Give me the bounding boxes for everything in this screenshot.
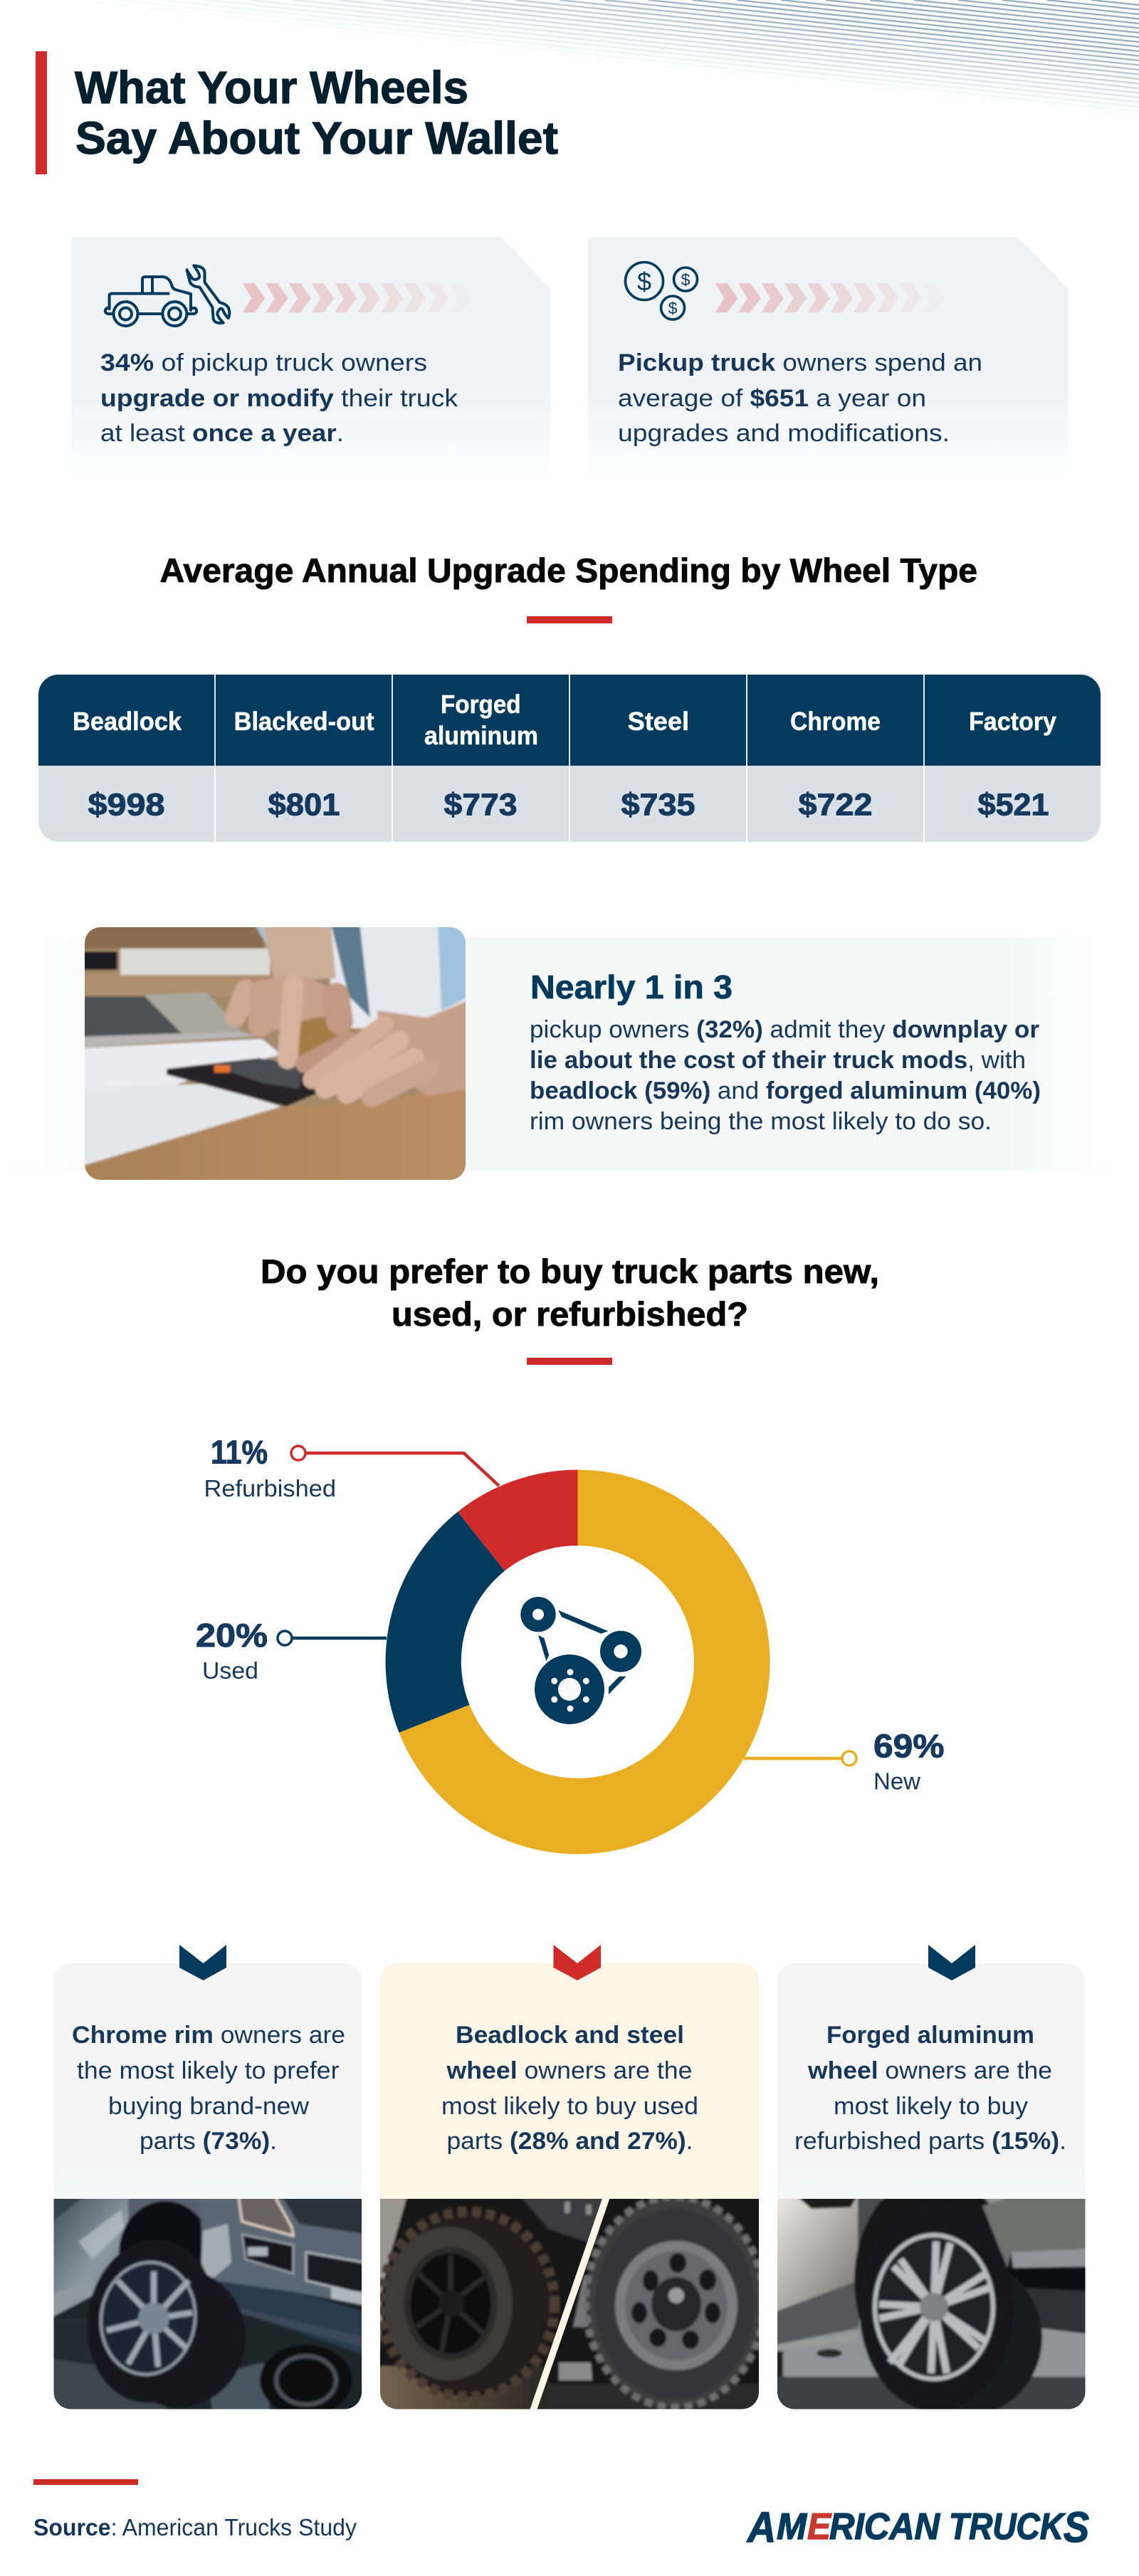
- card text: the most likely to prefer: [77, 2057, 339, 2084]
- logo: American Trucks: TRUCK: [949, 2506, 1066, 2548]
- panel: upgrade frequency: [71, 237, 550, 484]
- callout: refurbished: Refurbished: [204, 1475, 336, 1501]
- logo: American Trucks: E: [807, 2506, 831, 2548]
- column: Steel: $735: [621, 787, 695, 823]
- column: Blacked-out: $801: [268, 787, 340, 823]
- column: Steel: [621, 707, 695, 823]
- photo: chrome wheel: [50, 2195, 367, 2416]
- source line: Source: American Trucks Study: [33, 2514, 357, 2540]
- card background: [71, 237, 550, 484]
- heading: spending by wheel type: Average Annual Upgrade Spending by Wheel Type: [159, 551, 977, 589]
- panel: beadlock and steel owners: [377, 1945, 764, 2412]
- band text: pickup owners (32%) admit they downplay or: [530, 1016, 1039, 1043]
- heading: buying preference: Do you prefer to buy truck parts new,: [261, 1252, 879, 1290]
- footer accent bar: [33, 2479, 138, 2485]
- card text: 34% of pickup truck owners: [100, 349, 427, 376]
- chevron trail: [715, 283, 945, 312]
- card background: [54, 1963, 362, 2409]
- panel: average spend: [588, 237, 1068, 484]
- card text: at least once a year .: [100, 420, 344, 447]
- icon: coins: $: [668, 299, 678, 317]
- card text: parts (73%).: [140, 2128, 277, 2155]
- band background: [0, 937, 1139, 1171]
- card text: [618, 349, 982, 447]
- column: Factory: Factory: [969, 707, 1056, 736]
- title: What Your Wheels: [75, 62, 468, 113]
- card text: [100, 349, 458, 447]
- card text: Pickup truck owners spend an: [618, 349, 982, 376]
- band text: [530, 1016, 1041, 1135]
- icon: belt and pulleys: [520, 1597, 641, 1724]
- card text: average of $651 a year on: [618, 385, 926, 412]
- photo: beadlock and steel wheels: [377, 2195, 764, 2412]
- card text: most likely to buy used: [441, 2093, 698, 2120]
- column: Forged aluminum: $773: [444, 787, 517, 823]
- icon: chevron: [179, 1945, 226, 1980]
- column: Chrome: $722: [799, 787, 873, 823]
- card text: Beadlock and steel: [456, 2022, 684, 2049]
- column: Forged aluminum: aluminum: [424, 721, 538, 750]
- panel: nearly 1 in 3: [85, 927, 1039, 1180]
- column: Factory: $521: [978, 787, 1049, 823]
- slice: used 20%: [386, 1511, 505, 1733]
- card text: most likely to buy: [834, 2093, 1028, 2120]
- logo: American Trucks: RICAN: [829, 2506, 940, 2548]
- title accent bar: [36, 51, 47, 174]
- icon: truck and wrench: [105, 265, 229, 326]
- column: Beadlock: [73, 707, 182, 823]
- heading: buying preference: used, or refurbished?: [392, 1295, 748, 1333]
- band text: beadlock (59%) and forged aluminum (40%): [530, 1077, 1041, 1104]
- card text: wheel owners are the: [446, 2057, 692, 2084]
- callout: new: New: [873, 1768, 920, 1795]
- panel: chrome rim owners: [50, 1945, 367, 2416]
- column: Steel: Steel: [628, 707, 689, 736]
- card text: refurbished parts (15%).: [794, 2128, 1066, 2155]
- icon: coins: $: [681, 270, 691, 289]
- column: Chrome: Chrome: [790, 707, 881, 736]
- callout: refurbished: 11%: [211, 1433, 268, 1470]
- logo: American Trucks: [746, 2503, 1089, 2551]
- card text: wheel owners are the: [807, 2057, 1052, 2084]
- callout: used: Used: [202, 1657, 258, 1684]
- logo: American Trucks: A: [746, 2503, 776, 2551]
- card text: [794, 2022, 1066, 2155]
- card text: parts (28% and 27%) .: [447, 2128, 693, 2155]
- heading underline: [527, 616, 612, 623]
- column: Beadlock: Beadlock: [73, 707, 182, 736]
- column: Factory: [969, 707, 1056, 823]
- heading: buying preference: [261, 1252, 879, 1333]
- icon: coins: [625, 262, 698, 320]
- icon: chevron: [928, 1945, 975, 1980]
- card text: [72, 2022, 345, 2155]
- icon: chevron: [554, 1945, 601, 1980]
- chevron trail: [243, 283, 472, 312]
- card background: [777, 1963, 1085, 2409]
- photo: hands using a calculator: [78, 922, 473, 1185]
- title: [75, 62, 558, 164]
- slice: new 69%: [399, 1470, 770, 1854]
- heading underline: [527, 1358, 612, 1365]
- card background: [380, 1963, 759, 2409]
- slice: refurbished 11%: [458, 1470, 578, 1571]
- column: Beadlock: $998: [88, 787, 165, 823]
- card text: upgrade or modify their truck: [100, 385, 458, 412]
- title: Say About Your Wallet: [75, 112, 558, 164]
- column: Forged aluminum: Forged: [441, 690, 521, 719]
- icon: coins: $: [637, 267, 651, 296]
- callout: used: 20%: [196, 1617, 268, 1654]
- callout: new: 69%: [873, 1728, 944, 1765]
- callout: used: [196, 1617, 387, 1684]
- table: spending by wheel type: [38, 675, 1101, 842]
- panel: forged aluminum owners: [772, 1945, 1089, 2417]
- logo: American Trucks: M: [777, 2506, 808, 2548]
- column: Blacked-out: Blacked-out: [234, 707, 374, 736]
- card text: upgrades and modifications.: [618, 420, 950, 447]
- band text: rim owners being the most likely to do so.: [530, 1108, 992, 1135]
- column: Blacked-out: [234, 707, 374, 823]
- card text: buying brand-new: [108, 2093, 309, 2120]
- card text: Chrome rim owners are: [72, 2022, 345, 2049]
- logo: American Trucks: S: [1064, 2503, 1089, 2551]
- donut chart: [196, 1433, 944, 1854]
- column: Forged aluminum: [424, 690, 538, 823]
- band heading: Nearly 1 in 3: [530, 968, 733, 1005]
- card text: [441, 2022, 698, 2155]
- callout: new: [744, 1728, 944, 1795]
- photo: forged aluminum wheel: [777, 2199, 1085, 2409]
- callout: refurbished: [204, 1433, 499, 1501]
- band text: lie about the cost of their truck mods , with: [530, 1047, 1026, 1074]
- card text: Forged aluminum: [826, 2022, 1034, 2049]
- card background: [588, 237, 1068, 484]
- column: Chrome: [790, 707, 881, 823]
